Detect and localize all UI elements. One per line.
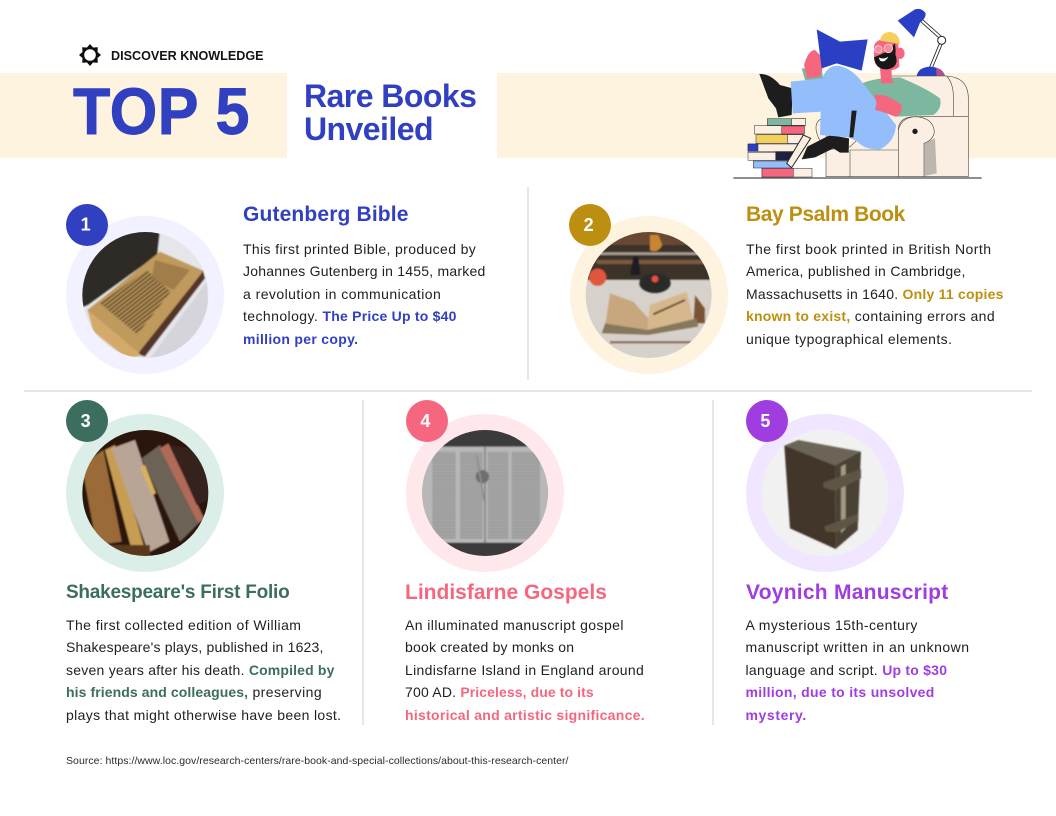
header band left bbox=[0, 73, 287, 158]
text: known to exist, containing errors and bbox=[746, 308, 995, 324]
subtitle bbox=[304, 78, 476, 147]
panel: Voynich Manuscript bbox=[746, 400, 970, 723]
person bbox=[759, 29, 941, 159]
divider: vertical bottom left bbox=[362, 400, 364, 725]
heading: Gutenberg Bible bbox=[243, 203, 409, 226]
text: Johannes Gutenberg in 1455, marked bbox=[243, 263, 486, 279]
subtitle: Rare Books bbox=[304, 78, 476, 114]
text: An illuminated manuscript gospel bbox=[405, 617, 624, 633]
lamp bbox=[898, 9, 946, 76]
text bbox=[243, 241, 486, 347]
heading: Voynich Manuscript bbox=[746, 581, 948, 604]
text: mystery. bbox=[746, 707, 807, 723]
book stack bbox=[748, 119, 812, 177]
text: Shakespeare's plays, published in 1623, bbox=[66, 639, 324, 655]
divider: horizontal bbox=[24, 390, 1032, 392]
text: seven years after his death. Compiled by bbox=[66, 662, 335, 678]
text: million, due to its unsolved bbox=[746, 684, 935, 700]
photo with ring and badge 5: 5 bbox=[760, 411, 770, 431]
heading: Bay Psalm Book bbox=[746, 203, 905, 226]
brand label: DISCOVER KNOWLEDGE bbox=[111, 49, 264, 63]
text: The first collected edition of William bbox=[66, 617, 301, 633]
text: a revolution in communication bbox=[243, 286, 441, 302]
text: technology. The Price Up to $40 bbox=[243, 308, 457, 324]
divider: vertical bottom right bbox=[712, 400, 714, 725]
illustration: man reading in armchair bbox=[733, 8, 982, 179]
text: historical and artistic significance. bbox=[405, 707, 645, 723]
text: language and script. Up to $30 bbox=[746, 662, 947, 678]
panel: Shakespeare's First Folio bbox=[66, 400, 341, 723]
heading: Lindisfarne Gospels bbox=[405, 581, 607, 604]
text: Massachusetts in 1640. Only 11 copies bbox=[746, 286, 1004, 302]
text: plays that might otherwise have been lost. bbox=[66, 707, 341, 723]
text: book created by monks on bbox=[405, 639, 574, 655]
photo with ring and badge 2 bbox=[569, 204, 728, 374]
title: top 5: TOP 5 bbox=[73, 74, 250, 148]
divider: vertical top bbox=[527, 187, 528, 380]
photo with ring and badge 3: 3 bbox=[81, 411, 91, 431]
text: A mysterious 15th-century bbox=[746, 617, 918, 633]
panel: Lindisfarne Gospels bbox=[405, 400, 645, 723]
text bbox=[746, 241, 1004, 347]
text bbox=[66, 617, 341, 723]
text: The first book printed in British North bbox=[746, 241, 992, 257]
panel: Bay Psalm Book bbox=[569, 203, 1004, 374]
text bbox=[405, 617, 645, 723]
subtitle: Unveiled bbox=[304, 111, 433, 147]
photo with ring and badge 1 bbox=[66, 204, 224, 374]
text: This first printed Bible, produced by bbox=[243, 241, 476, 257]
text: his friends and colleagues, preserving bbox=[66, 684, 322, 700]
armchair bbox=[816, 76, 968, 177]
photo with ring and badge 4 bbox=[406, 400, 564, 572]
header band right bbox=[497, 73, 1056, 158]
photo with ring and badge 2: 2 bbox=[584, 215, 594, 235]
photo with ring and badge 1: 1 bbox=[81, 215, 91, 235]
text: America, published in Cambridge, bbox=[746, 263, 966, 279]
text: manuscript written in an unknown bbox=[746, 639, 970, 655]
heading: Shakespeare's First Folio bbox=[66, 582, 289, 603]
photo with ring and badge 3 bbox=[66, 400, 224, 572]
text: Lindisfarne Island in England around bbox=[405, 662, 644, 678]
panel: Gutenberg Bible bbox=[66, 203, 486, 374]
text: unique typographical elements. bbox=[746, 331, 952, 347]
icon: brand mark bbox=[79, 44, 101, 66]
text: 700 AD. Priceless, due to its bbox=[405, 684, 594, 700]
photo with ring and badge 5 bbox=[746, 400, 904, 572]
source note: Source: https://www.loc.gov/research-centers/rare-book-and-special-collections/about-this-research-center/ bbox=[66, 754, 569, 766]
text: million per copy. bbox=[243, 331, 358, 347]
photo with ring and badge 4: 4 bbox=[420, 411, 430, 431]
ground line bbox=[733, 177, 982, 179]
text bbox=[746, 617, 970, 723]
